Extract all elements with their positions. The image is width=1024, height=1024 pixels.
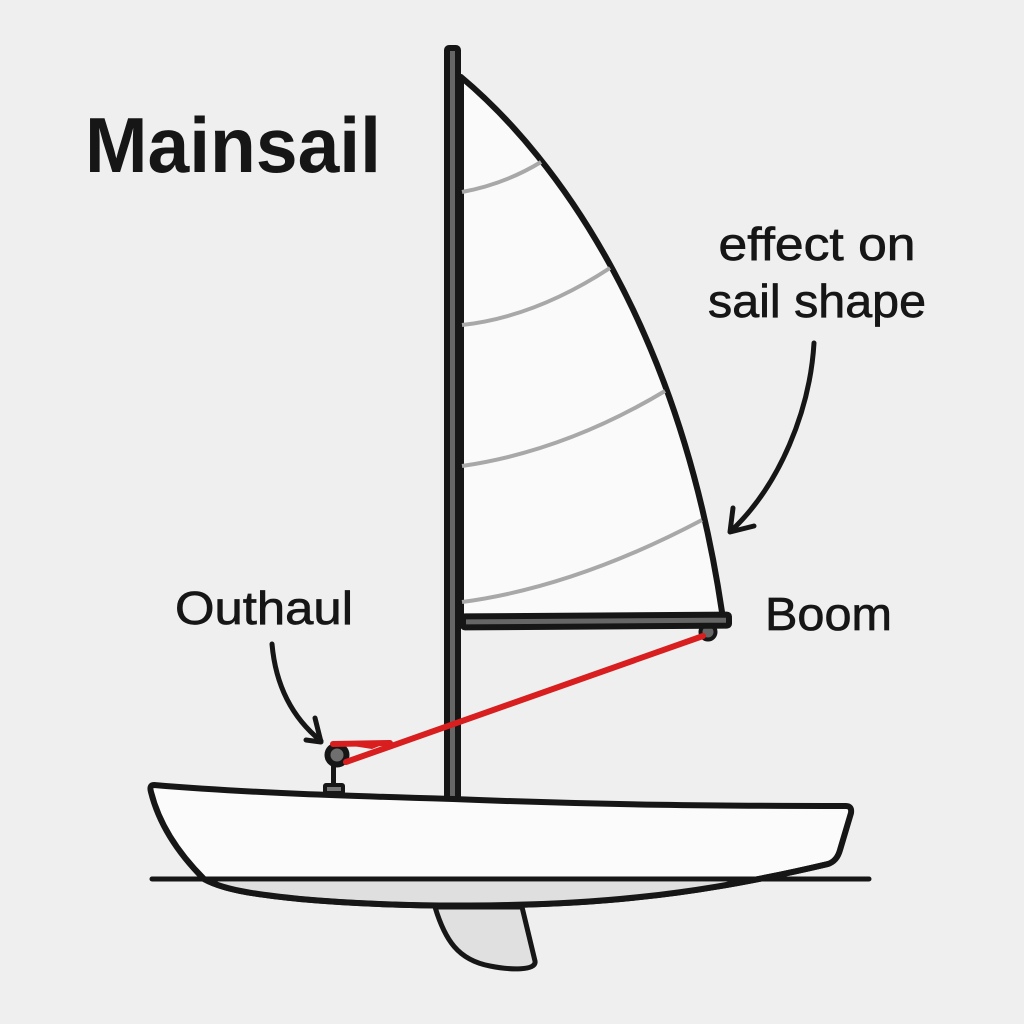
arrow: outhaul [272, 644, 321, 742]
waterline [152, 876, 869, 882]
arrow: effect on sail shape [730, 343, 814, 532]
label: outhaul: Outhaul [175, 582, 353, 634]
sail [461, 77, 723, 618]
title: Mainsail [85, 101, 381, 189]
red outhaul line [333, 636, 703, 762]
outhaul pulley [328, 746, 346, 764]
mast [447, 48, 458, 799]
label: effect on sail shape: effect on [718, 218, 916, 270]
label: boom: Boom [765, 588, 892, 640]
underwater hull shading [207, 882, 738, 903]
label: effect on sail shape, second line: sail shape [708, 275, 926, 327]
hull [150, 785, 851, 906]
boom [463, 615, 729, 627]
outhaul cleat and post [325, 765, 343, 793]
keel fin [435, 907, 535, 969]
sail seams [462, 162, 702, 602]
boom end pulley [700, 624, 716, 640]
